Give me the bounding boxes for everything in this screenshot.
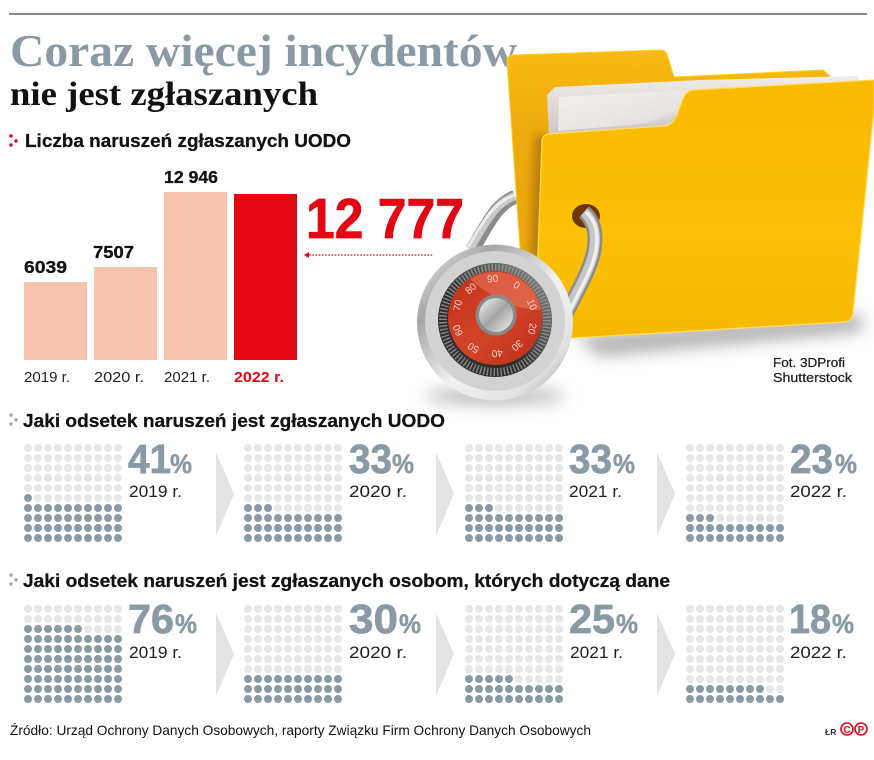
dot chart: UODO 2022: 2022 r.: [790, 483, 847, 501]
author and publisher mark: ŁR: [825, 727, 836, 737]
dial numbers: 50: [466, 339, 481, 355]
author and publisher mark: P: [858, 725, 865, 736]
photo credit: Fot. 3DProfi: [773, 356, 845, 370]
heading: share reported to data subjects: Jaki odsetek naruszeń jest zgłaszanych osobom, których dotyczą dane: [23, 571, 670, 591]
top rule: [9, 13, 867, 15]
arrow: [657, 613, 675, 696]
dot chart: data subjects 2019: 76: [128, 596, 174, 642]
arrow: [216, 452, 234, 536]
dot chart: data subjects 2021: %: [616, 609, 638, 639]
dot chart: data subjects 2022: 18: [789, 596, 831, 642]
author and publisher mark: [825, 723, 867, 737]
dial numbers: [451, 273, 539, 359]
dot chart: UODO 2019: [23, 436, 192, 543]
dial numbers: 10: [524, 298, 539, 313]
dot chart: UODO 2020: 33: [349, 436, 392, 482]
bar chart: reported breaches: 2021 r.: [164, 370, 210, 386]
dot chart: data subjects 2020: 30: [349, 596, 398, 642]
dial numbers: 30: [509, 337, 524, 353]
dot chart: UODO 2022: 23: [790, 436, 833, 482]
dot chart: UODO 2020: [243, 436, 414, 543]
dot chart: data subjects 2021: [464, 596, 638, 704]
dot chart: data subjects 2021: 25: [569, 596, 615, 642]
dot chart: UODO 2021: 33: [569, 436, 612, 482]
arrow: [216, 613, 234, 696]
title: nie jest zgłaszanych: [10, 76, 318, 113]
bar chart: reported breaches: 2020 r.: [94, 370, 144, 386]
dot chart: data subjects 2020: %: [399, 609, 421, 639]
photo credit: [773, 356, 853, 385]
bar chart: reported breaches: 2022 r.: [234, 370, 284, 386]
dot chart: data subjects 2020: 2020 r.: [349, 644, 407, 662]
arrow: [657, 452, 675, 536]
dot chart: UODO 2019: 2019 r.: [129, 483, 182, 501]
dot chart: data subjects 2022: %: [832, 609, 854, 639]
dial numbers: 0: [511, 280, 522, 292]
dot chart: UODO 2021: %: [613, 449, 635, 479]
arrow: dotted pointer to 2022 bar: [304, 252, 433, 258]
dot chart: UODO 2020: 2020 r.: [349, 483, 407, 501]
dot chart: UODO 2022: [685, 436, 857, 543]
bar chart: reported breaches: 7507: [93, 242, 134, 262]
author and publisher mark: C: [843, 725, 851, 736]
arrow: [436, 452, 454, 536]
bar chart: reported breaches: 6039: [24, 257, 67, 277]
dot chart: data subjects 2022: [685, 596, 854, 704]
illustration: folder with combination lock: [417, 50, 874, 404]
source note: Źródło: Urząd Ochrony Danych Osobowych, raporty Związku Firm Ochrony Danych Osobowych: [10, 722, 591, 738]
bar chart: reported breaches: 12 946: [164, 167, 218, 187]
heading: number of breaches reported: Liczba naruszeń zgłaszanych UODO: [25, 131, 351, 151]
dot chart: data subjects 2021: 2021 r.: [570, 644, 623, 662]
dial numbers: 90: [487, 273, 499, 286]
title: Coraz więcej incydentów: [10, 26, 518, 76]
bar chart: reported breaches: [24, 167, 297, 386]
dot chart: data subjects 2019: %: [175, 609, 197, 639]
heading: share reported to UODO: Jaki odsetek naruszeń jest zgłaszanych UODO: [23, 411, 445, 431]
arrow: [436, 613, 454, 696]
dial numbers: 80: [464, 281, 479, 297]
dot chart: UODO 2021: 2021 r.: [569, 483, 622, 501]
dot chart: data subjects 2022: 2022 r.: [790, 644, 847, 662]
dot chart: UODO 2019: 41: [128, 436, 171, 482]
dial numbers: 60: [451, 322, 466, 337]
dial numbers: 40: [491, 346, 503, 359]
big number callout: 12 777: [306, 187, 464, 251]
title: [10, 26, 518, 113]
dot chart: UODO 2020: %: [392, 449, 414, 479]
dot chart: UODO 2021: [464, 436, 635, 543]
dot chart: data subjects 2019: 2019 r.: [129, 644, 182, 662]
bar chart: reported breaches: 2019 r.: [24, 370, 70, 386]
dial numbers: 70: [452, 298, 465, 312]
dot chart: UODO 2019: %: [170, 449, 192, 479]
dot chart: UODO 2022: %: [835, 449, 857, 479]
dial numbers: 20: [525, 322, 538, 336]
dot chart: data subjects 2020: [243, 596, 421, 704]
photo credit: Shutterstock: [773, 371, 853, 385]
dot chart: data subjects 2019: [23, 596, 197, 704]
